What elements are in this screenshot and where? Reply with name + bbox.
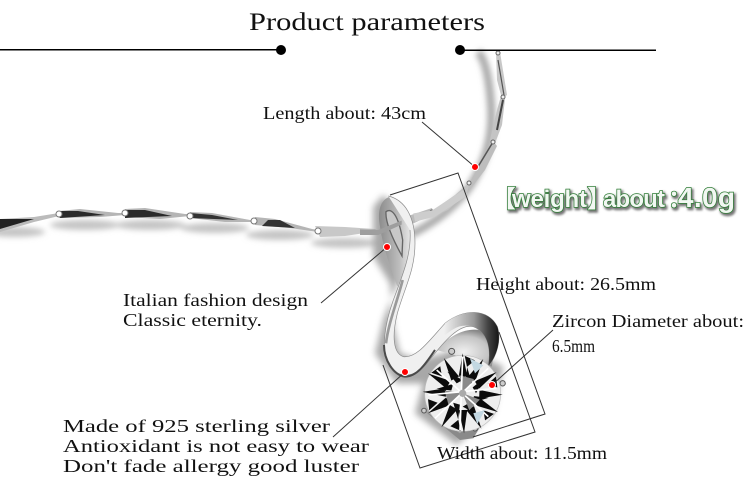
weight callout shadow: 】 — [588, 188, 612, 215]
weight callout: ： — [668, 186, 692, 213]
label: material: Made of 925 sterling silver — [63, 416, 330, 436]
diamond prongs — [422, 348, 505, 431]
weight callout shadow: 4.0g — [680, 184, 736, 215]
diamond setting — [423, 393, 500, 440]
label: zircon: 6.5mm — [552, 336, 595, 356]
pendant ribbon upper sweep — [443, 312, 499, 366]
label: material — [63, 416, 369, 476]
weight callout shadow: about — [604, 188, 666, 215]
pendant inner swirl — [437, 330, 497, 367]
measurement box: width — [383, 332, 535, 468]
title rule: left — [0, 45, 286, 55]
label: design: Italian fashion design — [123, 290, 308, 310]
pendant loop opening — [386, 211, 403, 256]
label: length: Length about: 43cm — [263, 103, 426, 123]
label: height: Height about: 26.5mm — [476, 274, 656, 294]
pendant bail crossing — [360, 221, 402, 235]
weight callout: weight — [511, 186, 587, 213]
label: design: Classic eternity. — [123, 310, 262, 330]
label: width: Width about: 11.5mm — [437, 443, 607, 463]
label: zircon — [552, 311, 744, 356]
necklace chain: left — [0, 208, 379, 248]
weight callout: 4.0g — [678, 182, 735, 213]
pendant shadow — [373, 195, 503, 445]
pendant ribbon body — [384, 196, 499, 375]
weight callout: 【 — [492, 186, 516, 213]
pendant bail right link — [413, 190, 468, 222]
measurement box: height — [390, 173, 545, 437]
diamond — [423, 353, 503, 433]
weight callout shadow — [494, 184, 736, 215]
weight callout — [492, 182, 736, 215]
pendant — [360, 190, 505, 445]
title: Product parameters — [249, 9, 485, 36]
weight callout: 】 — [587, 186, 611, 213]
pendant ribbon lower edge — [384, 345, 435, 377]
weight callout shadow: ： — [670, 188, 694, 215]
title rule: right — [455, 45, 656, 55]
pendant ribbon left shade — [386, 280, 403, 343]
leader: design — [321, 244, 390, 303]
leader: length — [422, 122, 478, 170]
leader: zircon — [488, 330, 553, 388]
label: design — [123, 290, 308, 330]
weight callout shadow: 【 — [494, 188, 518, 215]
leader: material — [333, 368, 408, 437]
weight callout shadow: weight — [512, 188, 588, 215]
necklace chain: right — [378, 51, 507, 242]
label: material: Antioxidant is not easy to wear — [63, 436, 369, 456]
label: material: Don't fade allergy good luster — [63, 456, 359, 476]
label: zircon: Zircon Diameter about: — [552, 311, 744, 331]
pendant loop — [379, 197, 413, 287]
weight callout: about — [603, 186, 665, 213]
